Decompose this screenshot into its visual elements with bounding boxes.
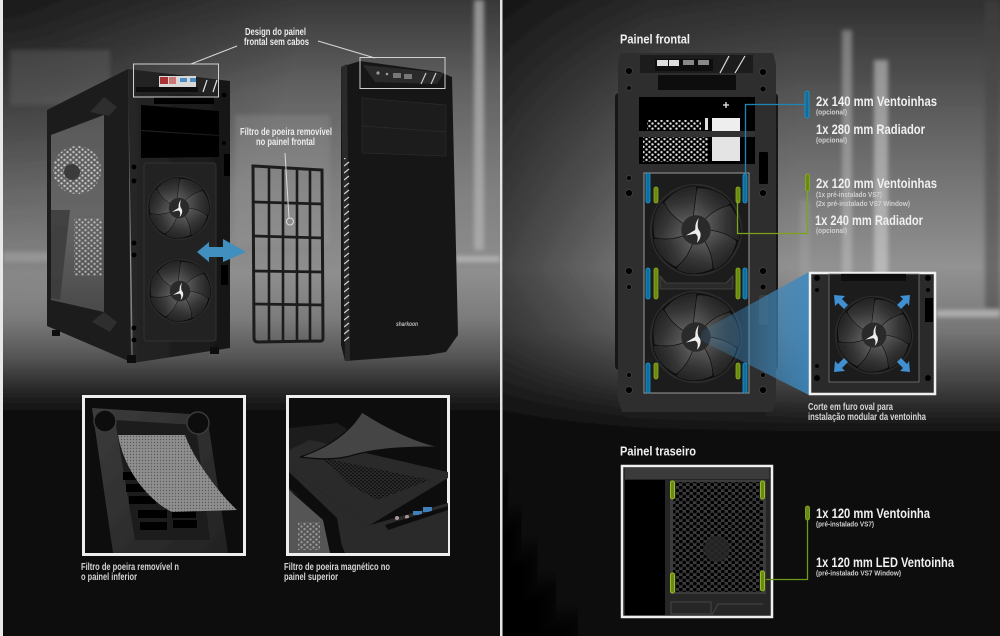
blue zoom beam xyxy=(700,272,809,395)
blue slots for 140 mm mounting xyxy=(646,173,747,393)
caption: bottom filter: o painel inferior xyxy=(81,572,137,583)
heading: removable front filter xyxy=(240,127,332,148)
rear panel photo xyxy=(622,466,772,617)
side panel of case xyxy=(47,69,131,362)
frame cross bar xyxy=(660,276,733,289)
label: 240 mm radiator: (opcional) xyxy=(816,228,847,235)
label: 240 mm radiator xyxy=(815,212,923,235)
panel: right closed case xyxy=(341,61,458,361)
label: 140 mm fans: 2x 140 mm Ventoinhas xyxy=(816,93,937,109)
panel: left background xyxy=(3,0,500,636)
label: 120 mm fans xyxy=(816,175,937,208)
callout box on open case I/O xyxy=(134,64,218,97)
dust filter frame xyxy=(253,166,323,342)
label: 140 mm fans xyxy=(816,93,937,116)
label: 120 mm fans: (1x pré-instalado VS7) xyxy=(816,192,882,199)
caption: top filter xyxy=(284,562,390,583)
label: 120 mm LED rear fan xyxy=(816,554,954,578)
label: 280 mm radiator: (opcional) xyxy=(816,138,847,144)
centre divider xyxy=(500,0,502,636)
fan frame xyxy=(644,173,749,393)
drive bays xyxy=(141,97,219,158)
inset: oval fan mounting holes xyxy=(810,273,935,394)
filter pointer with circle marker xyxy=(285,153,294,225)
caption: oval cutout xyxy=(808,402,926,423)
panel: right background xyxy=(503,0,1000,636)
sharkoon logo: sharkoon xyxy=(396,321,418,328)
rubber feet xyxy=(94,410,209,434)
label: 120 mm LED rear fan: 1x 120 mm LED Ventoinha xyxy=(816,554,954,570)
mount holes xyxy=(626,68,766,394)
leader: rear fan xyxy=(766,506,810,580)
caption: oval cutout: instalação modular da ventoinha xyxy=(808,412,926,423)
rear fan hub xyxy=(704,536,730,562)
label: 120 mm rear fan: (pré-instalado VS7) xyxy=(816,522,874,528)
icon: blue double arrow xyxy=(197,239,246,262)
green rear slots xyxy=(670,481,764,593)
upper fan xyxy=(144,171,217,245)
heading: cable-free front panel xyxy=(244,27,309,48)
panel: bottom filter photo xyxy=(84,396,244,554)
heading: removable front filter: Filtro de poeira removível xyxy=(240,127,332,138)
case feet xyxy=(52,330,219,363)
label: 120 mm rear fan xyxy=(816,505,930,528)
heading: removable front filter: no painel frontal xyxy=(256,137,315,148)
leader: 120 mm xyxy=(738,174,810,234)
green slots for 120 mm mounting xyxy=(654,187,740,379)
callout leader lines xyxy=(191,41,375,64)
side slots xyxy=(759,152,768,325)
inset fan xyxy=(832,289,921,380)
fan frame xyxy=(132,92,230,342)
caption: top filter: Filtro de poeira magnético no xyxy=(284,562,390,573)
caption: oval cutout: Corte em furo oval para xyxy=(808,402,893,413)
side ventilation hatch xyxy=(344,158,350,342)
heading: cable-free front panel: Design do painel xyxy=(245,27,306,38)
open drive bay showing interior xyxy=(639,97,755,164)
drive bay covers xyxy=(362,98,446,156)
caption: bottom filter: Filtro de poeira removível n xyxy=(81,562,179,573)
icon: four blue arrows xyxy=(834,295,910,372)
front view of case xyxy=(615,53,778,418)
caption: bottom filter xyxy=(81,562,179,583)
label: 280 mm radiator xyxy=(816,121,925,144)
top I/O ports xyxy=(385,506,448,530)
front I/O module xyxy=(640,55,753,90)
lower front fan xyxy=(646,283,751,390)
front I/O module xyxy=(136,72,218,96)
caption: top filter: painel superior xyxy=(284,572,338,583)
label: 120 mm LED rear fan: (pré-instalado VS7 Window) xyxy=(816,570,901,578)
panel: top filter photo xyxy=(288,396,448,554)
peeling mesh filter xyxy=(118,435,237,512)
label: 280 mm radiator: 1x 280 mm Radiador xyxy=(816,121,925,137)
heading: cable-free front panel: frontal sem cabos xyxy=(244,37,309,48)
label: 140 mm fans: (opcional) xyxy=(816,110,847,116)
heading: rear panel: Painel traseiro xyxy=(620,444,696,458)
magnetic filter sheet xyxy=(300,412,440,459)
panel: left case with open front xyxy=(47,69,230,363)
label: 120 mm fans: 2x 120 mm Ventoinhas xyxy=(816,175,937,191)
lower fan xyxy=(145,254,218,328)
label: 120 mm rear fan: 1x 120 mm Ventoinha xyxy=(816,505,930,521)
leader: 140 mm xyxy=(746,91,809,174)
top front bezel xyxy=(363,65,444,84)
label: 240 mm radiator: 1x 240 mm Radiador xyxy=(815,212,923,228)
label: 120 mm fans: (2x pré-instalado VS7 Window) xyxy=(816,201,910,208)
heading: front panel: Painel frontal xyxy=(620,32,690,46)
front face of case xyxy=(128,69,230,363)
callout box on closed case I/O xyxy=(360,58,445,88)
left white edge xyxy=(0,0,3,636)
upper front fan xyxy=(646,176,751,283)
